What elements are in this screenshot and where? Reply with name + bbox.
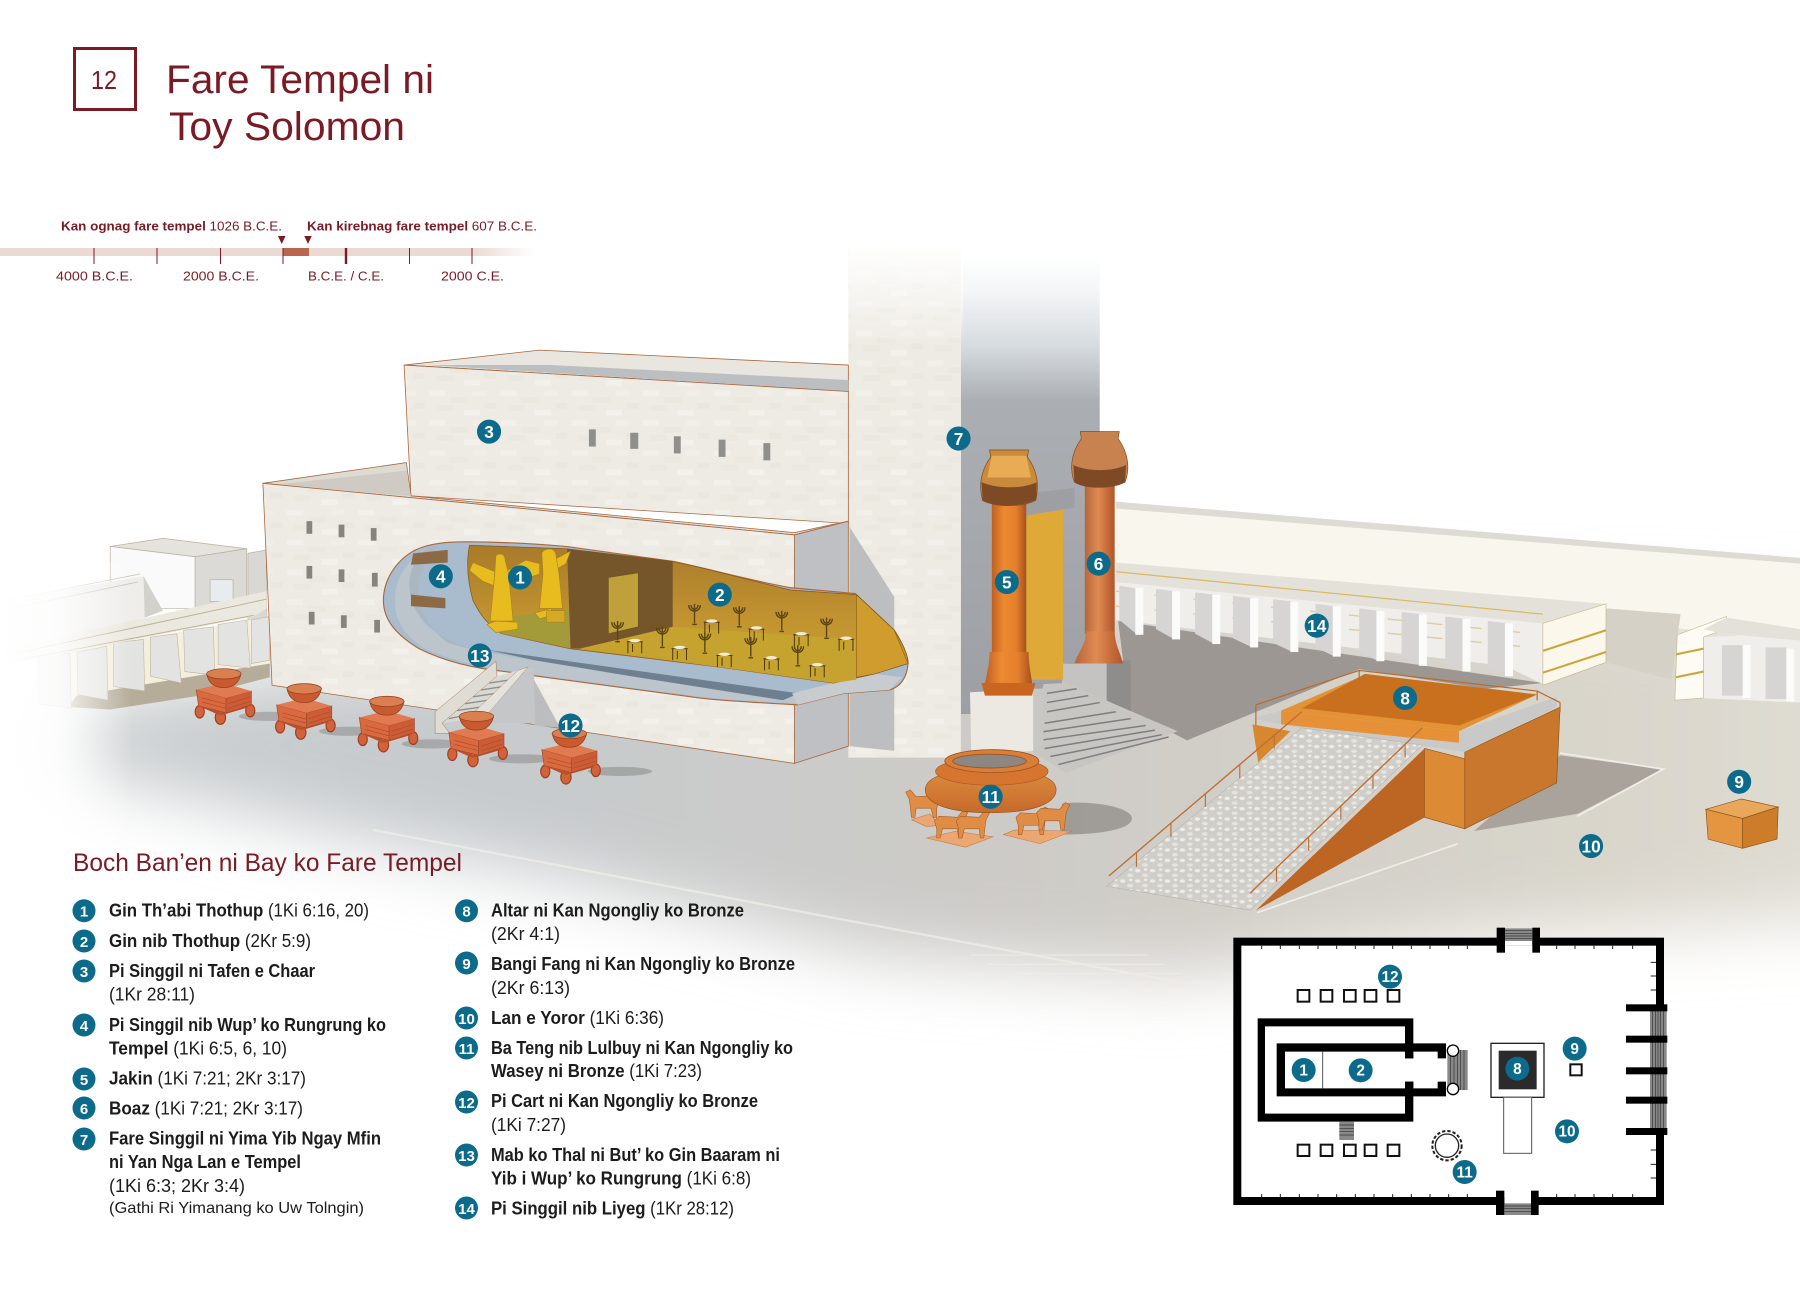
numbered markers on illustration: 8 xyxy=(1400,688,1410,708)
cutaway showing interior xyxy=(383,542,908,705)
chapter number box xyxy=(74,48,136,110)
numbered markers on illustration: 10 xyxy=(1582,836,1601,856)
numbered markers on illustration: 6 xyxy=(1094,554,1103,574)
legend column 1: Pi Singgil nib Wup’ ko Rungrung ko xyxy=(109,1015,386,1035)
legend column 2: 13 xyxy=(458,1148,475,1165)
door lintel xyxy=(1026,488,1074,515)
bronze basin stand xyxy=(1706,799,1778,848)
legend column 2: Lan e Yoror (1Ki 6:36) xyxy=(491,1008,664,1028)
columns xyxy=(38,616,270,708)
colonnade floor shadow xyxy=(69,664,270,709)
numbered markers on illustration xyxy=(429,420,1751,858)
legend column 2: 14 xyxy=(458,1201,475,1218)
numbered markers on illustration: 5 xyxy=(1002,572,1012,592)
tower front face xyxy=(848,247,961,758)
legend column 1: Fare Singgil ni Yima Yib Ngay Mfin xyxy=(109,1129,381,1149)
sea shadow xyxy=(1062,803,1132,835)
numbered markers on illustration: 4 xyxy=(436,567,446,587)
legend column 1: 4 xyxy=(80,1018,89,1035)
numbered markers on illustration: 9 xyxy=(1734,772,1744,792)
legend column 1: (1Ki 6:3; 2Kr 3:4) xyxy=(109,1176,245,1196)
legend column 1: Boaz (1Ki 7:21; 2Kr 3:17) xyxy=(109,1098,303,1118)
title: Toy Solomon xyxy=(169,105,405,149)
bronze sea and oxen xyxy=(906,750,1132,847)
legend column 1: 1 xyxy=(80,904,88,920)
legend column 2: 8 xyxy=(462,904,471,920)
altar front face xyxy=(1425,748,1465,829)
north gate xyxy=(1497,928,1540,953)
numbered markers on illustration: 11 xyxy=(982,787,1000,807)
plan markers: 10 xyxy=(1558,1124,1576,1141)
floor plan xyxy=(1237,928,1668,1215)
plan markers: 8 xyxy=(1513,1061,1522,1078)
carts xyxy=(195,669,652,784)
legend column 2: 10 xyxy=(458,1011,475,1028)
illustration: temple courtyard xyxy=(0,243,1800,985)
court outline xyxy=(1257,753,1663,913)
title xyxy=(166,58,434,149)
side chamber inner band xyxy=(395,548,798,704)
plan markers: 11 xyxy=(1457,1164,1473,1181)
front wall ghost and steps xyxy=(373,830,1200,985)
courtyard floor xyxy=(0,591,1800,978)
altar rim xyxy=(1281,711,1459,743)
legend column 2: (1Ki 7:27) xyxy=(491,1115,566,1135)
timeline scale labels: 2000 C.E. xyxy=(441,268,504,284)
timeline scale labels: B.C.E. / C.E. xyxy=(308,268,384,284)
title: Fare Tempel ni xyxy=(166,58,434,102)
basin on plan xyxy=(1570,1064,1582,1075)
colonnade beam xyxy=(0,591,266,666)
altar grate xyxy=(1302,674,1537,726)
temple door xyxy=(1026,510,1063,680)
colonnade beam xyxy=(1116,563,1606,623)
altar side face xyxy=(1465,707,1560,829)
legend column 1: 5 xyxy=(80,1072,88,1089)
altar shadow xyxy=(1474,755,1663,831)
legend column 2: 9 xyxy=(462,956,471,973)
event labels: Kan ognag fare tempel 1026 B.C.E. xyxy=(61,218,282,234)
legend column 2: Pi Singgil nib Liyeg (1Kr 28:12) xyxy=(491,1199,734,1219)
menorahs and tables xyxy=(612,604,854,677)
stairs to side chambers xyxy=(435,661,560,734)
plinth of Boaz xyxy=(1062,660,1131,729)
legend column 1: 6 xyxy=(80,1101,88,1118)
numbered markers on illustration: 3 xyxy=(484,422,494,442)
altar on plan xyxy=(1491,1043,1544,1153)
legend column 1: (Gathi Ri Yimanang ko Uw Tolngin) xyxy=(109,1200,364,1217)
legend column 1: (1Kr 28:11) xyxy=(109,985,195,1005)
legend column 1: Jakin (1Ki 7:21; 2Kr 3:17) xyxy=(109,1069,306,1089)
ox pedestals xyxy=(911,814,1072,847)
numbered markers on illustration: 13 xyxy=(470,646,489,666)
right end floor xyxy=(792,674,902,705)
bronze altar xyxy=(1252,670,1560,829)
legend column 1: 2 xyxy=(80,934,88,951)
gatehouse xyxy=(110,538,266,654)
legend column 1: Gin nib Thothup (2Kr 5:9) xyxy=(109,931,311,951)
wall ticks xyxy=(1262,946,1656,1197)
timeline xyxy=(0,218,537,284)
altar ramp xyxy=(1107,712,1425,910)
lower storey block xyxy=(263,463,848,763)
legend column 1: 3 xyxy=(80,964,88,981)
sea bowl xyxy=(925,769,1056,813)
legend column 2: Yib i Wup’ ko Rungrung (1Ki 6:8) xyxy=(491,1169,751,1189)
timeline scale labels: 2000 B.C.E. xyxy=(183,268,259,284)
water-coloured floor strip xyxy=(487,650,799,700)
altar ledge xyxy=(1252,697,1557,752)
timeline scale labels xyxy=(56,268,504,284)
legend heading: Boch Ban’en ni Bay ko Fare Tempel xyxy=(73,849,462,877)
timeline band xyxy=(0,248,473,256)
gold floor xyxy=(580,627,856,683)
chapter number box: 12 xyxy=(91,65,117,95)
colonnade gap xyxy=(38,616,270,703)
legend column 1: ni Yan Nga Lan e Tempel xyxy=(109,1152,301,1172)
plan markers xyxy=(1292,965,1587,1184)
legend column 2: Bangi Fang ni Kan Ngongliy ko Bronze xyxy=(491,954,795,974)
timeline markers xyxy=(278,236,312,244)
outer wall xyxy=(0,576,145,654)
legend column 1: Tempel (1Ki 6:5, 6, 10) xyxy=(109,1039,287,1059)
numbered markers on illustration: 2 xyxy=(715,585,725,605)
carts on plan xyxy=(1298,990,1399,1156)
legend column 2: 12 xyxy=(458,1095,475,1112)
legend column 2: Wasey ni Bronze (1Ki 7:23) xyxy=(491,1061,702,1081)
legend column 1: Pi Singgil ni Tafen e Chaar xyxy=(109,961,315,981)
shadow on inner court xyxy=(1118,621,1543,740)
east gate xyxy=(1626,1004,1668,1135)
plinth of Jakin xyxy=(970,689,1043,753)
altar left leg xyxy=(1252,724,1290,762)
oxen xyxy=(906,790,1070,838)
numbered markers on illustration: 1 xyxy=(515,568,525,588)
legend column 2: Mab ko Thal ni But’ ko Gin Baaram ni xyxy=(491,1145,780,1165)
plan markers: 2 xyxy=(1356,1063,1365,1080)
pillar Boaz xyxy=(1072,432,1128,664)
upper storey block xyxy=(404,350,848,523)
legend column 1 xyxy=(72,899,386,1217)
timeline scale labels: 4000 B.C.E. xyxy=(56,268,133,284)
plan markers: 1 xyxy=(1299,1062,1308,1079)
inner door xyxy=(608,573,638,634)
temple period span xyxy=(282,248,309,256)
corner block xyxy=(1543,604,1606,685)
legend column 2: Ba Teng nib Lulbuy ni Kan Ngongliy ko xyxy=(491,1038,793,1058)
south gate xyxy=(1496,1191,1539,1215)
partition wall xyxy=(567,549,673,649)
gold interior rooms xyxy=(468,545,908,683)
shelf beams xyxy=(411,550,448,565)
cutaway outer shell xyxy=(383,542,908,705)
cherubim xyxy=(470,549,571,633)
legend column 2: (2Kr 4:1) xyxy=(491,924,560,944)
legend column 2: Altar ni Kan Ngongliy ko Bronze xyxy=(491,901,744,921)
numbered markers on illustration: 7 xyxy=(954,429,963,449)
colonnade of side chambers xyxy=(1116,563,1606,685)
legend column 2 xyxy=(455,899,795,1220)
temple building plan xyxy=(1258,1018,1468,1140)
sea on plan xyxy=(1432,1131,1462,1160)
legend column 2: (2Kr 6:13) xyxy=(491,978,570,998)
plan markers: 9 xyxy=(1570,1041,1579,1058)
tower shaded side xyxy=(961,255,1100,714)
legend column 1: 7 xyxy=(80,1132,88,1149)
event labels xyxy=(61,218,537,234)
right end wall panels xyxy=(856,595,908,677)
entry stairs xyxy=(1029,683,1178,773)
event labels: Kan kirebnag fare tempel 607 B.C.E. xyxy=(307,218,537,234)
left colonnade xyxy=(0,538,270,872)
plan markers: 12 xyxy=(1381,969,1399,986)
back wall of courtyard xyxy=(1116,502,1800,680)
tower of the porch xyxy=(848,243,1100,758)
right colonnade xyxy=(1675,616,1800,703)
numbered markers on illustration: 14 xyxy=(1307,616,1327,636)
legend column 2: 11 xyxy=(459,1041,474,1058)
pillar Jakin xyxy=(981,450,1037,696)
numbered markers on illustration: 12 xyxy=(561,716,580,736)
courtyard wall xyxy=(1237,942,1660,1201)
legend column 1: Gin Th’abi Thothup (1Ki 6:16, 20) xyxy=(109,901,369,921)
legend column 2: Pi Cart ni Kan Ngongliy ko Bronze xyxy=(491,1091,758,1111)
